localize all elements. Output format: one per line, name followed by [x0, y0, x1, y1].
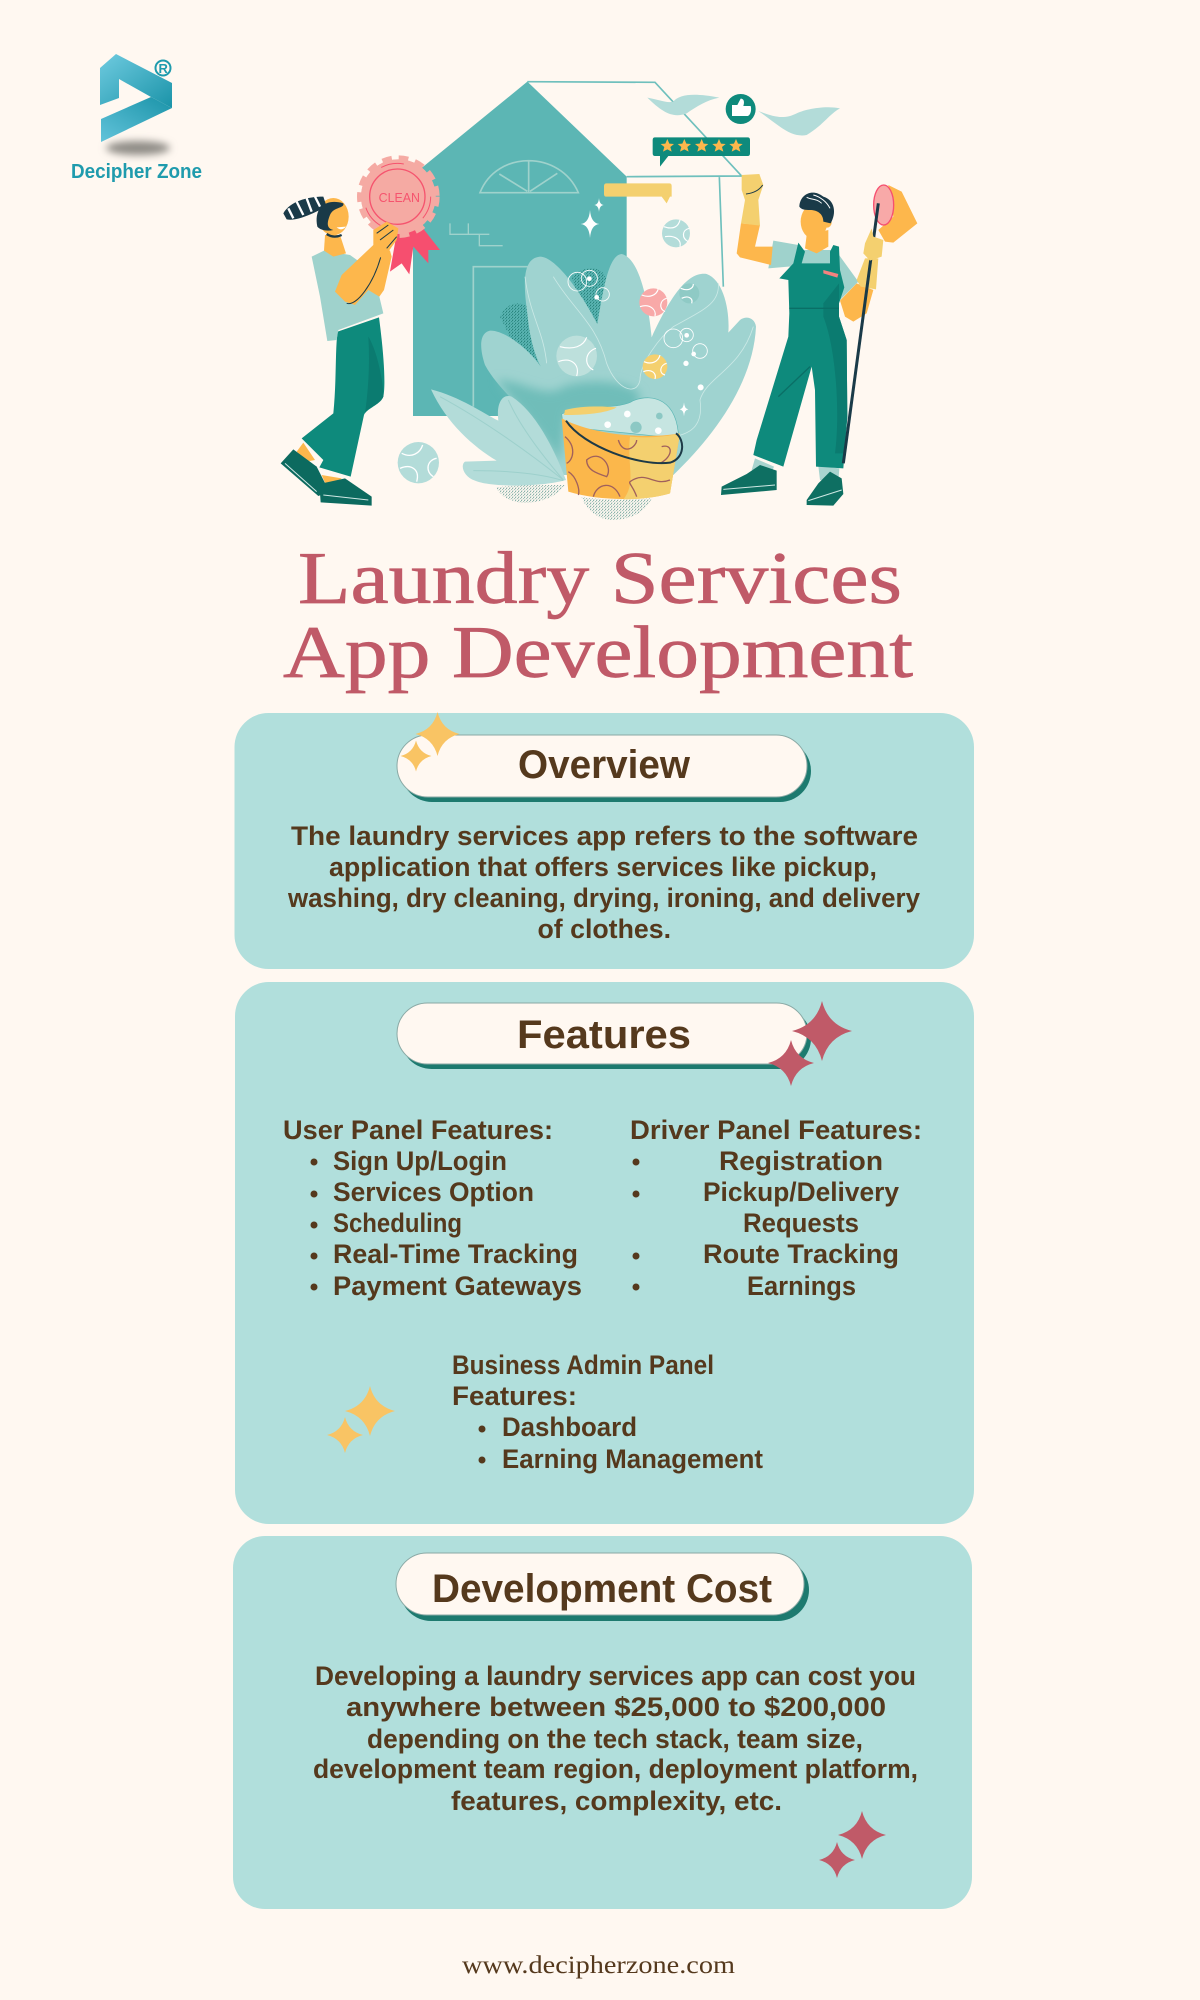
birds [647, 95, 719, 115]
man: shirt [768, 241, 858, 300]
overview text: application that offers services like pickup, [329, 852, 877, 882]
overview text [287, 821, 920, 944]
driver panel features [630, 1115, 922, 1301]
driver panel features: Registration [719, 1146, 883, 1176]
cost text: Developing a laundry services app can cost you [315, 1661, 916, 1691]
plant leaves [481, 254, 756, 475]
driver panel features: Pickup/Delivery [703, 1177, 899, 1207]
lower left leaves [431, 389, 566, 486]
icon: yellow sparkles lower [327, 1386, 395, 1453]
business admin panel features: Dashboard [502, 1412, 637, 1442]
business admin panel features: Business Admin Panel [452, 1350, 714, 1380]
hair bun [283, 197, 327, 220]
footer: website: www.decipherzone.com [462, 1952, 736, 1979]
overview text: The laundry services app refers to the software [291, 821, 918, 851]
ball [398, 442, 439, 483]
driver panel features: Earnings [747, 1271, 856, 1301]
man: overalls [753, 243, 847, 468]
driver panel features: Route Tracking [703, 1239, 899, 1269]
bubbles [568, 270, 707, 358]
panel: development cost [233, 1536, 972, 1909]
business admin panel features [452, 1350, 763, 1474]
cost text: anywhere between $25,000 to $200,000 [346, 1692, 886, 1722]
clean badge [361, 159, 436, 234]
title [283, 538, 914, 694]
heading pill: development cost: Development Cost [432, 1567, 772, 1611]
icon: red sparkles [768, 1001, 852, 1086]
ankles [297, 443, 342, 486]
panel: overview [234, 712, 974, 969]
balls [556, 219, 707, 379]
man: right arm [840, 283, 873, 322]
cost text: depending on the tech stack, team size, [367, 1724, 863, 1754]
user panel features: User Panel Features: [283, 1115, 553, 1145]
overview text: washing, dry cleaning, drying, ironing, and delivery [287, 883, 920, 913]
heading pill: overview: Overview [518, 743, 691, 787]
bucket with foam [562, 398, 679, 438]
business admin panel features: Earning Management [502, 1444, 763, 1474]
illustration: laundry scene [281, 82, 917, 520]
shoes [281, 449, 329, 496]
man: head [805, 230, 828, 253]
mop [878, 185, 917, 243]
icon: red sparkles lower [819, 1811, 886, 1878]
shirt [312, 251, 383, 341]
man: raised arm and glove [737, 223, 773, 265]
logo: Decipher Zone [71, 54, 202, 183]
icon: yellow sparkles [400, 712, 460, 772]
user panel features: Services Option [333, 1177, 534, 1207]
jeans [302, 317, 384, 477]
user panel features: Scheduling [333, 1208, 462, 1238]
house with windows and plants [413, 82, 756, 520]
panel: features [235, 982, 974, 1524]
birds, thumbs-up, rating and man with mop [647, 94, 917, 506]
user panel features [283, 1115, 582, 1301]
driver panel features: Requests [743, 1208, 859, 1238]
user panel features: Sign Up/Login [333, 1146, 507, 1176]
user panel features: Payment Gateways [333, 1271, 582, 1301]
cost text: development team region, deployment platform, [313, 1754, 918, 1784]
heading pill: features: Features [517, 1013, 691, 1057]
woman holding clean badge [281, 159, 440, 506]
overview text: of clothes. [538, 914, 671, 944]
arm and hands [335, 245, 392, 305]
icon: thumbs up [726, 94, 756, 124]
title: Laundry Services [298, 538, 902, 620]
neck and head [324, 235, 346, 257]
icon: yellow speech bar [604, 183, 672, 203]
driver panel features: Driver Panel Features: [630, 1115, 922, 1145]
title: App Development [283, 612, 914, 694]
business admin panel features: Features: [452, 1381, 577, 1411]
logo: Decipher Zone: R [158, 61, 168, 76]
heading pill: overview [397, 735, 811, 802]
user panel features: Real-Time Tracking [333, 1239, 578, 1269]
heading pill: features [397, 1003, 811, 1069]
cost text: features, complexity, etc. [451, 1786, 782, 1816]
logo: Decipher Zone: Decipher Zone [71, 161, 202, 183]
woman holding clean badge: CLEAN [379, 191, 420, 205]
stipple shadows [496, 485, 565, 503]
heading pill: development cost [396, 1553, 809, 1621]
man: shoes and socks [752, 458, 839, 482]
rating: five stars [653, 137, 750, 167]
cost text [313, 1661, 918, 1816]
ribbon [390, 227, 440, 274]
